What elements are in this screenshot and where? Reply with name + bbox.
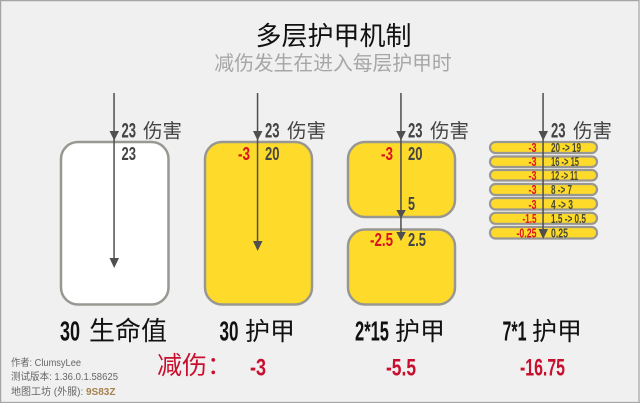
label: 30 armor: 护甲 (245, 312, 295, 348)
reduction value: 2*15 armor: -5.5 (386, 354, 416, 382)
armor box (205, 142, 312, 304)
credits: 作者: ClumsyLee (11, 357, 81, 369)
damage label: 伤害 (143, 114, 182, 144)
credits (11, 357, 118, 398)
damage label (551, 114, 612, 144)
strip values: 1.5 -> 0.5 (551, 212, 586, 226)
health box (61, 142, 168, 304)
strip reductions: -1.5 (522, 212, 537, 226)
damage label: 23 (122, 119, 136, 142)
strip reductions (516, 141, 537, 240)
credits: 地图工坊 (外服): 9S83Z (11, 385, 115, 398)
strip values: 12 -> 11 (551, 169, 578, 183)
strip values: 8 -> 7 (551, 183, 572, 197)
second layer values (370, 230, 426, 250)
reduction: -3 (238, 144, 250, 164)
damage arrow (538, 93, 548, 239)
armor strips (490, 142, 597, 238)
strip values: 4 -> 3 (551, 198, 573, 212)
title: 多层护甲机制 (255, 16, 412, 53)
reduction label: 减伤： (157, 346, 232, 382)
first layer values: 5 (408, 194, 415, 214)
strip values: 0.25 (551, 226, 568, 240)
first layer values: 20 (408, 144, 422, 164)
remaining damage: 20 (265, 144, 280, 164)
reduction value: 30 armor: -3 (250, 354, 266, 382)
label: 7*1 armor (502, 312, 582, 348)
first layer values (381, 144, 422, 214)
damage arrow (110, 93, 119, 268)
label: 30 armor: 30 (220, 316, 238, 346)
label: 30 health: 30 (60, 316, 80, 346)
first layer values: -3 (381, 144, 393, 164)
strip reductions: -3 (528, 198, 537, 212)
panel: 7x1 armor (490, 93, 612, 240)
strip reductions: -0.25 (516, 226, 537, 240)
damage label: 23 (408, 119, 422, 142)
damage label: 伤害 (573, 114, 612, 144)
health remaining: 23 (122, 144, 136, 164)
damage label (122, 114, 182, 144)
panel: 30 health (61, 93, 182, 304)
strip values: 20 -> 19 (551, 141, 581, 155)
damage label: 伤害 (430, 114, 469, 144)
damage label (265, 114, 326, 144)
strip reductions: -3 (528, 169, 537, 183)
damage label: 23 (265, 119, 280, 142)
reduction value: 7*1 armor: -16.75 (520, 354, 565, 382)
damage label: 23 (551, 119, 566, 142)
credits: 测试版本: 1.36.0.1.58625 (11, 370, 118, 383)
armor box 1 (348, 142, 455, 217)
armor box 2 (348, 230, 455, 304)
damage label: 伤害 (287, 114, 326, 144)
label: 30 health: 生命值 (89, 311, 167, 348)
second layer values: -2.5 (370, 230, 393, 250)
label: 2*15 armor: 护甲 (395, 312, 445, 348)
label: 7*1 armor: 7*1 (502, 316, 526, 346)
strip reductions: -3 (528, 141, 537, 155)
strip reductions: -3 (528, 155, 537, 169)
strip values: 16 -> 15 (551, 155, 579, 169)
label: 2*15 armor (355, 312, 445, 348)
second layer values: 2.5 (408, 230, 426, 250)
label: 30 armor (220, 312, 295, 348)
damage arrow (396, 93, 406, 241)
panel: 30 armor (205, 93, 326, 304)
damage arrow (253, 93, 262, 251)
strip reductions: -3 (528, 183, 537, 197)
damage label (408, 114, 469, 144)
label: 7*1 armor: 护甲 (532, 312, 582, 348)
panel: 2x15 armor (348, 93, 469, 304)
label: 2*15 armor: 2*15 (355, 316, 389, 346)
strip values (551, 141, 586, 240)
subtitle: 减伤发生在进入每层护甲时 (214, 47, 452, 76)
